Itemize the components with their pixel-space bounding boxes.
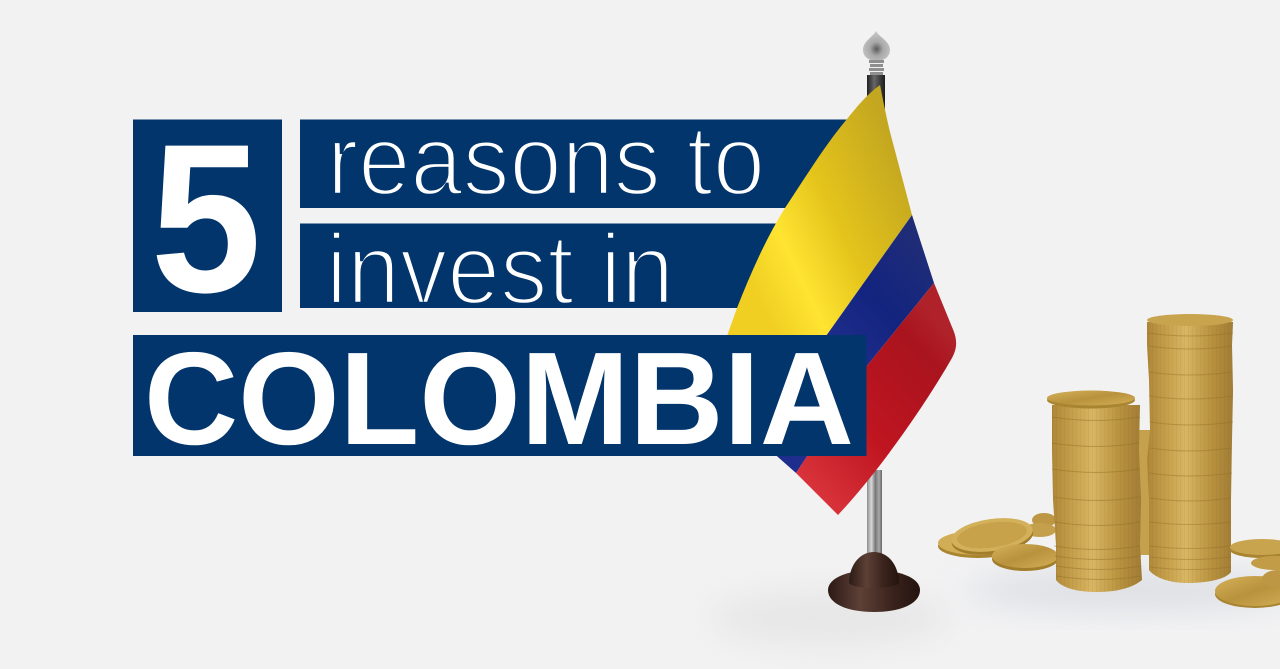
red stripe	[796, 283, 956, 515]
icon: rear coin stack	[1138, 430, 1156, 555]
Colombian flag	[727, 85, 956, 515]
flag pole	[863, 31, 890, 560]
icon: loose coins left	[938, 513, 1058, 571]
upper dark pole	[867, 75, 885, 125]
threaded collar	[869, 60, 884, 75]
yellow stripe	[727, 85, 912, 336]
box: COLOMBIA: COLOMBIA	[144, 325, 854, 472]
heading line: reasons to: reasons to	[327, 104, 765, 216]
box: number background	[133, 120, 282, 312]
icon: flag base	[828, 552, 920, 612]
ground shadows	[710, 570, 1280, 646]
blue stripe	[770, 215, 934, 473]
icon: short coin stack	[1047, 390, 1142, 592]
heading line: invest in: invest in	[326, 214, 674, 326]
icon: loose coins right	[1215, 539, 1280, 608]
lower steel pole	[867, 470, 882, 560]
finial	[863, 31, 890, 60]
number 5: 5	[150, 100, 262, 336]
icon: tall coin stack	[1147, 314, 1233, 583]
